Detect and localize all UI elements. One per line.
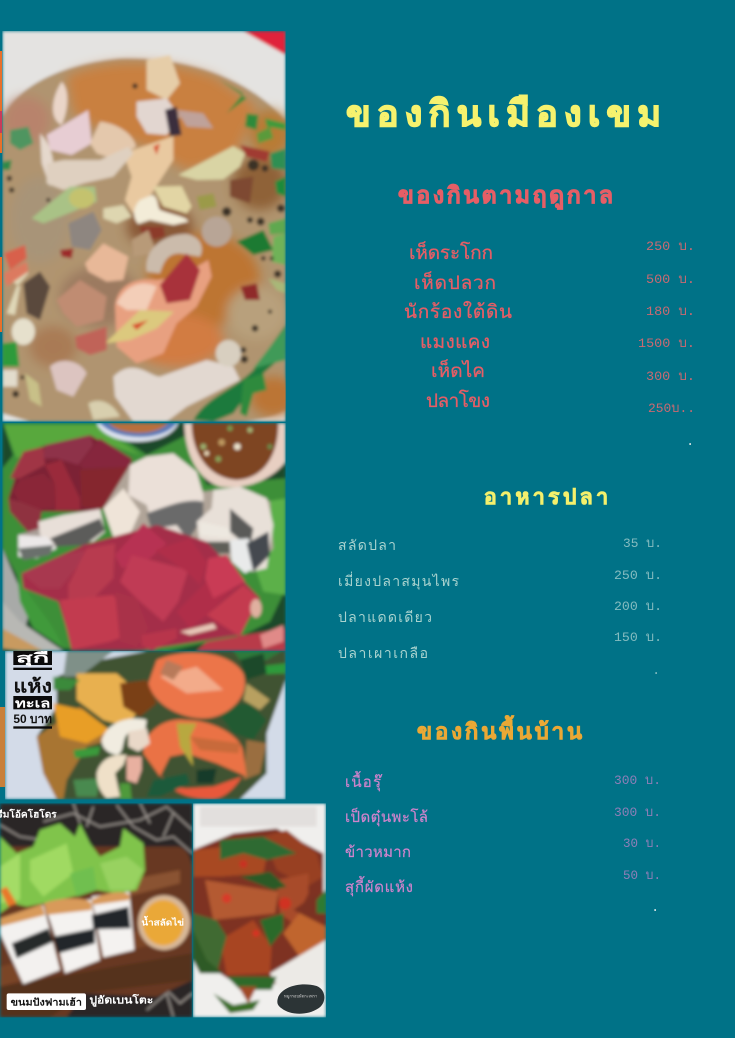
section 1 prices: 180 บ. xyxy=(646,304,695,319)
photo text labels: น้ำสลัดไข่ xyxy=(141,915,184,927)
section 2 prices xyxy=(614,536,662,678)
section 1 prices xyxy=(638,239,695,449)
section 1 list: seasonal food: เห็ดไค xyxy=(431,358,485,382)
section 2 prices: 150 บ. xyxy=(614,630,662,645)
section 3 list: local food xyxy=(345,771,428,897)
section 2 list: fish dishes: สลัดปลา xyxy=(338,537,396,553)
section 1 prices: 300 บ. xyxy=(646,369,695,384)
section 2 prices: 200 บ. xyxy=(614,599,662,614)
photo text labels: ปูอัดเบนโตะ xyxy=(89,993,153,1007)
section 1 list: seasonal food: ปลาโขง xyxy=(426,389,490,412)
section 2 prices: . xyxy=(652,663,660,678)
photo text labels: ขนมปังฟามเฮ้า xyxy=(11,996,82,1008)
photo: spicy seafood dish with price label xyxy=(5,648,286,799)
left price label: 50 บาท xyxy=(13,712,52,726)
photo: bread rolls on wooden board xyxy=(0,803,192,1017)
section 3 prices xyxy=(614,773,661,915)
left price label: ทะเล xyxy=(15,696,50,710)
section 3 list: local food: ข้าวหมาก xyxy=(345,844,411,861)
section 3 list: local food: สุกี้ผัดแห้ง xyxy=(345,876,413,897)
section 3 prices: 300 บ. xyxy=(614,805,661,820)
section 3 list: local food: เป็ดตุ๋นพะโล้ xyxy=(345,807,428,827)
photo text labels xyxy=(0,809,184,1010)
section 2 list: fish dishes xyxy=(338,537,459,661)
left edge colour strip xyxy=(0,51,5,787)
section 1 list: seasonal food: เห็ดปลวก xyxy=(414,270,496,294)
section 3 list: local food: เนื้อรุ๊ xyxy=(345,771,383,792)
left price label xyxy=(13,648,52,729)
left price label: แห้ง xyxy=(13,676,52,697)
section 2 list: fish dishes: ปลาแดดเดียว xyxy=(338,609,432,625)
section 3 heading: ของกินพื้นบ้าน xyxy=(417,715,582,744)
left price label: สุกี้ xyxy=(16,648,52,667)
section 2 prices: 250 บ. xyxy=(614,568,662,583)
photo: raw meat platter on banana leaf xyxy=(2,423,286,651)
section 1 prices: . xyxy=(686,434,694,449)
section 1 prices: 1500 บ. xyxy=(638,336,695,351)
section 3 prices: 30 บ. xyxy=(623,836,661,851)
section 2 list: fish dishes: เมี่ยงปลาสมุนไพร xyxy=(338,572,459,590)
price badge xyxy=(277,984,324,1014)
photo: crispy pork with basil xyxy=(193,803,326,1017)
section 2 heading: อาหารปลา xyxy=(484,486,608,509)
photo: seafood tom yum soup xyxy=(2,31,297,422)
section 1 list: seasonal food: เห็ดระโกก xyxy=(409,240,493,264)
section 2 list: fish dishes: ปลาเผาเกลือ xyxy=(338,645,428,661)
section 1 prices: 500 บ. xyxy=(646,272,695,287)
section 1 list: seasonal food: แมงแคง xyxy=(420,332,490,353)
section 1 list: seasonal food xyxy=(404,240,512,412)
section 1 prices: 250บ.. xyxy=(648,401,695,416)
section 1 prices: 250 บ. xyxy=(646,239,695,254)
section 1 heading: ของกินตามฤดูกาล xyxy=(398,182,613,210)
section 3 prices: 50 บ. xyxy=(623,868,661,883)
section 2 prices: 35 บ. xyxy=(623,536,662,551)
price badge: หมูกรอบผัดกะเพรา xyxy=(284,994,318,1000)
section 3 prices: 300 บ. xyxy=(614,773,661,788)
title: ของกินเมืองเขม xyxy=(346,93,661,134)
section 3 prices: . xyxy=(651,900,659,915)
section 1 list: seasonal food: นักร้องใต้ดิน xyxy=(404,301,512,323)
